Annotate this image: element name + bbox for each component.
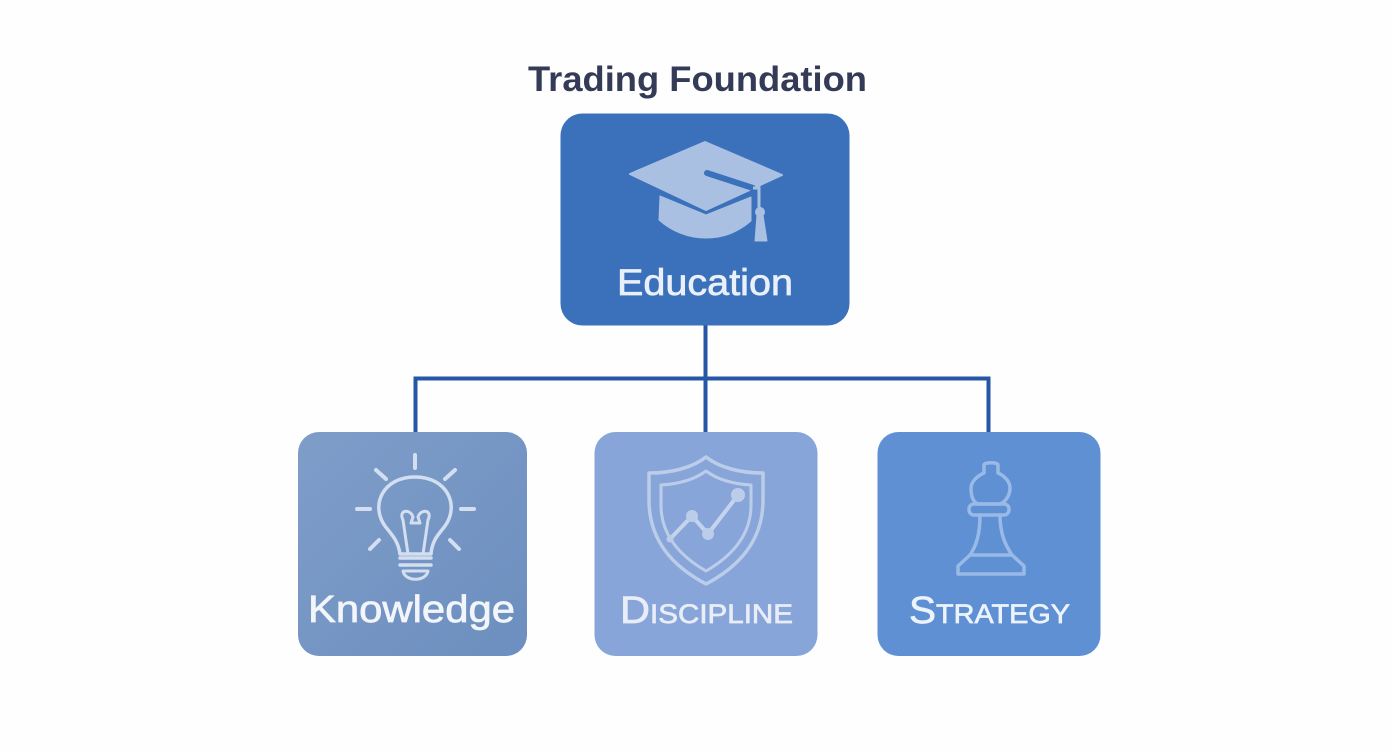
title: Trading Foundation <box>528 60 867 99</box>
icon: shield with chart <box>649 457 763 584</box>
icon: chess pawn <box>958 463 1024 574</box>
label: knowledge: Knowledge <box>308 589 515 631</box>
panel: discipline <box>594 432 818 656</box>
panel: knowledge <box>298 432 527 656</box>
connector lines <box>416 325 988 432</box>
label: strategy: Strategy <box>909 590 1070 632</box>
panel: education <box>560 114 850 326</box>
label: discipline: Discipline <box>620 590 793 632</box>
icon: graduation cap <box>630 142 782 241</box>
label: education: Education <box>617 262 793 303</box>
icon: light bulb <box>357 455 474 579</box>
panel: strategy <box>878 432 1100 656</box>
